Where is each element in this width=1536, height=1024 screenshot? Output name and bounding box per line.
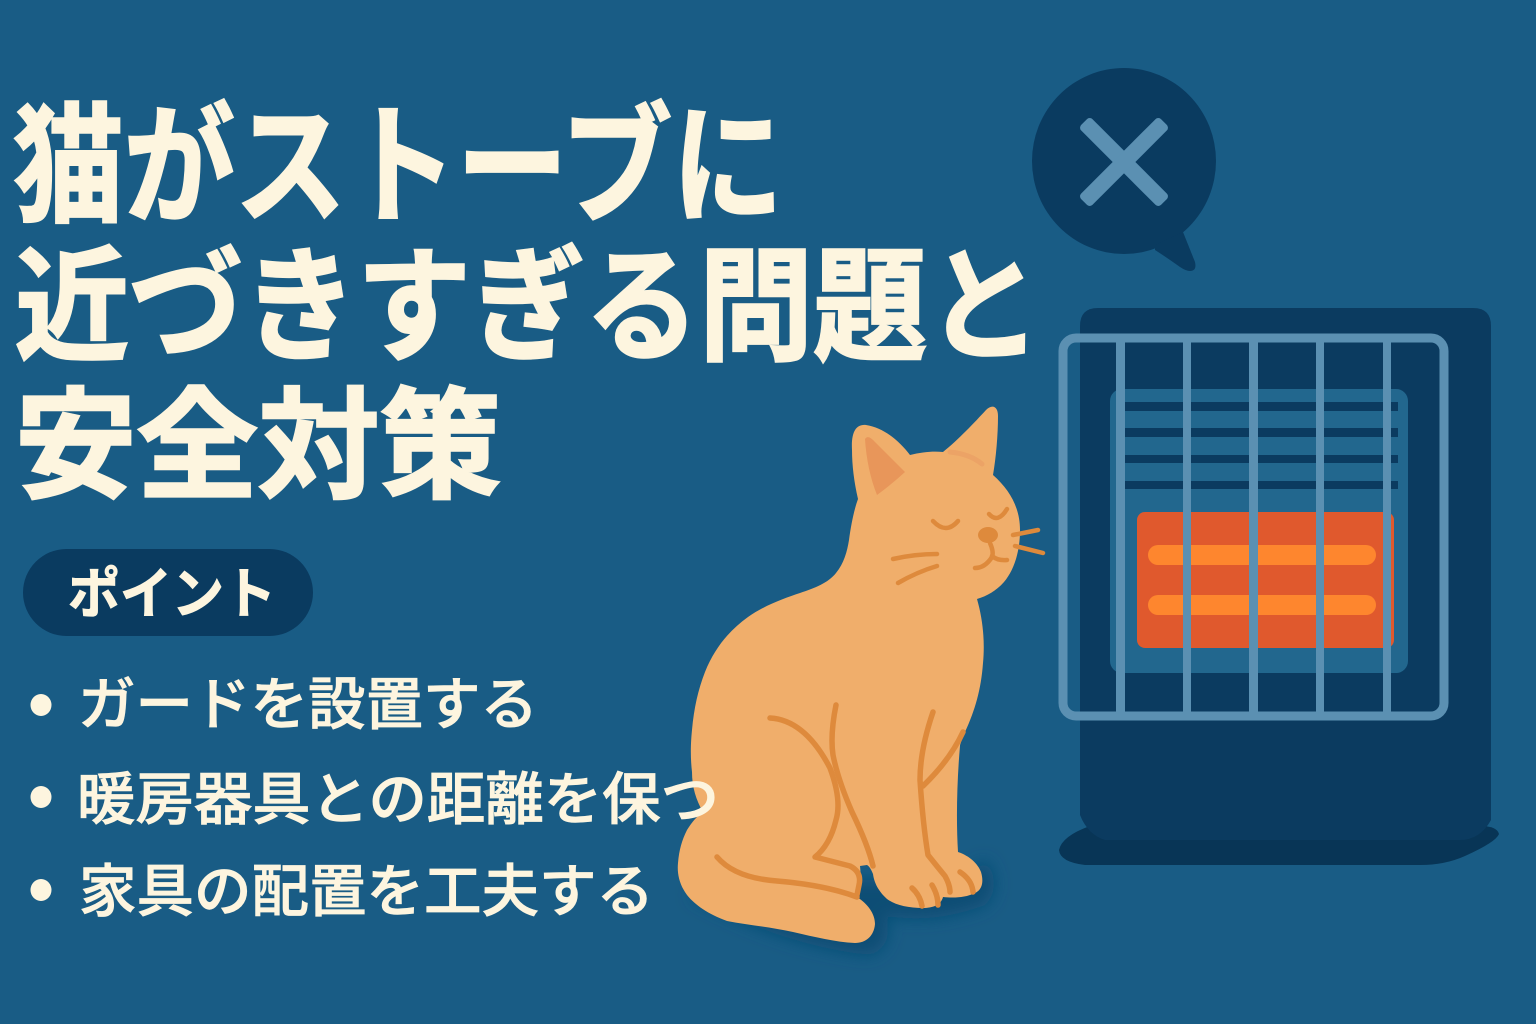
- bullet item 2: 暖房器具との距離を保つ: [77, 768, 719, 832]
- glowing heating element: [1137, 512, 1394, 648]
- bullet list: [30, 673, 719, 924]
- icon: speech bubble with X mark: [1032, 68, 1216, 271]
- title line 1: 猫がストーブに: [13, 94, 783, 240]
- safety guard grille: [1063, 338, 1444, 716]
- vent panel: [1110, 389, 1408, 673]
- illustration: orange cat: [678, 407, 1043, 955]
- bullet item 1: ガードを設置する: [78, 673, 538, 737]
- cat nose: [978, 527, 998, 543]
- illustration: stove heater: [1059, 308, 1499, 865]
- title line 2: 近づきすぎる問題と: [15, 239, 1041, 377]
- title line 3: 安全対策: [15, 380, 501, 514]
- cat body silhouette: [678, 407, 1020, 943]
- badge: ポイント: [23, 549, 313, 636]
- heater body: [1080, 308, 1491, 840]
- cat leg and tail lines: [717, 705, 973, 906]
- badge: ポイント: ポイント: [68, 563, 276, 625]
- heater base: [1059, 826, 1499, 865]
- title: [13, 94, 1041, 514]
- bullet item 3: 家具の配置を工夫する: [79, 860, 654, 924]
- forehead mark: [950, 452, 982, 464]
- inner ear: [865, 437, 905, 495]
- cat face: [893, 509, 1043, 583]
